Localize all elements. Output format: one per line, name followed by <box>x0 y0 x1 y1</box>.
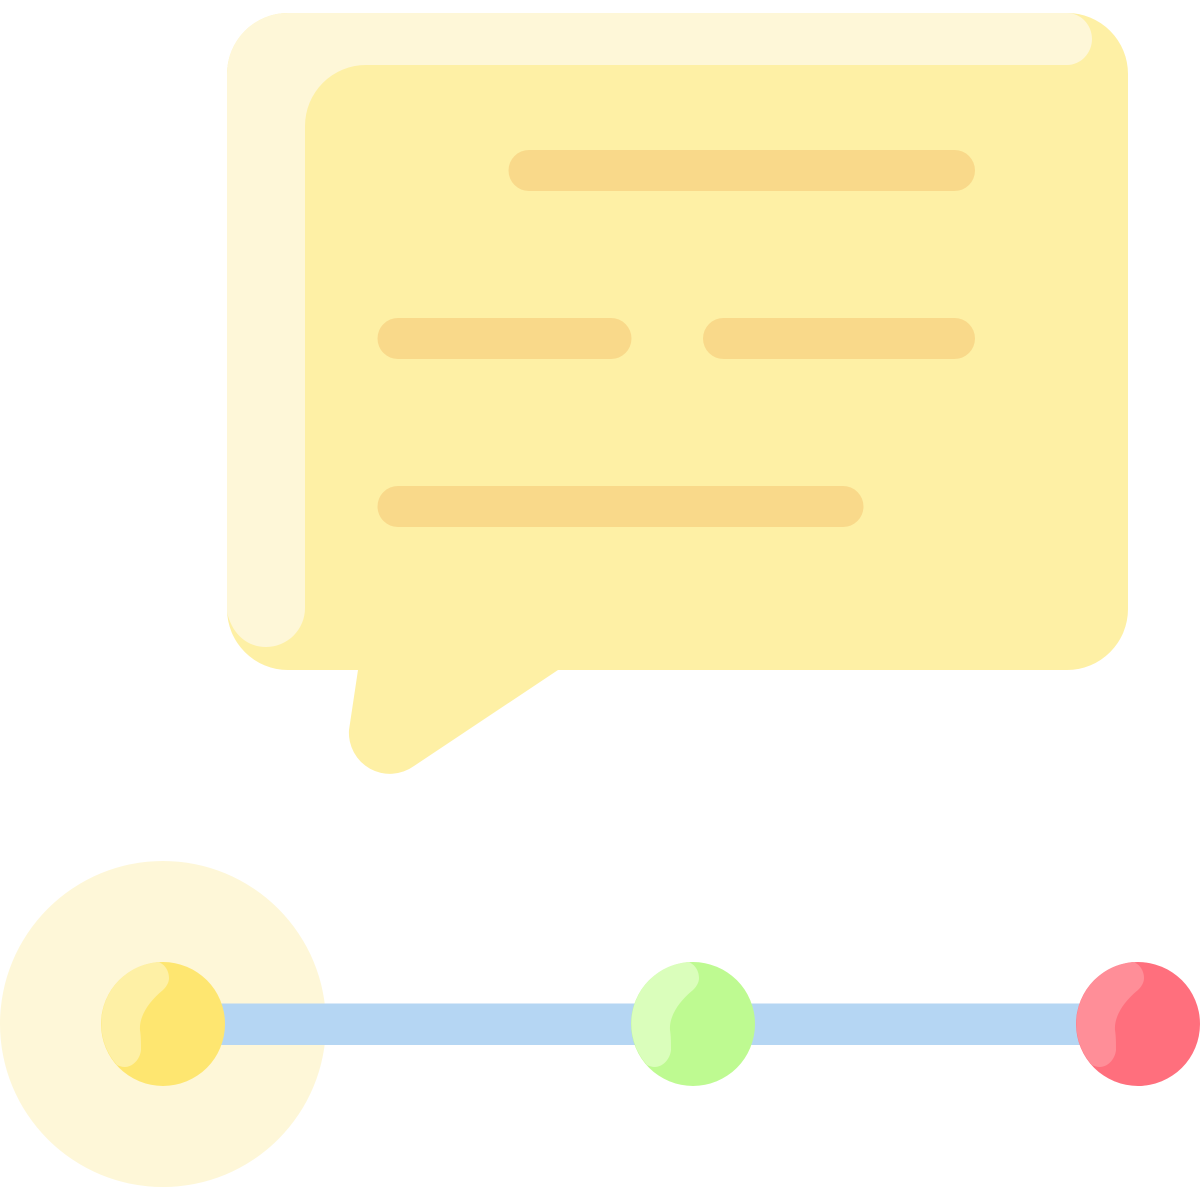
active marker halo <box>0 861 326 1187</box>
yellow marker <box>101 962 225 1086</box>
text line 1 <box>508 150 975 191</box>
red marker <box>1076 962 1200 1086</box>
timeline bar <box>215 1004 1085 1045</box>
bubble highlight <box>227 13 1092 647</box>
text line 3 <box>378 486 864 527</box>
green marker <box>631 962 755 1086</box>
bubble body with tail <box>227 13 1128 774</box>
speech bubble <box>227 13 1128 774</box>
text line 2 right <box>703 318 975 359</box>
timeline <box>0 861 1200 1187</box>
text line 2 left <box>378 318 632 359</box>
